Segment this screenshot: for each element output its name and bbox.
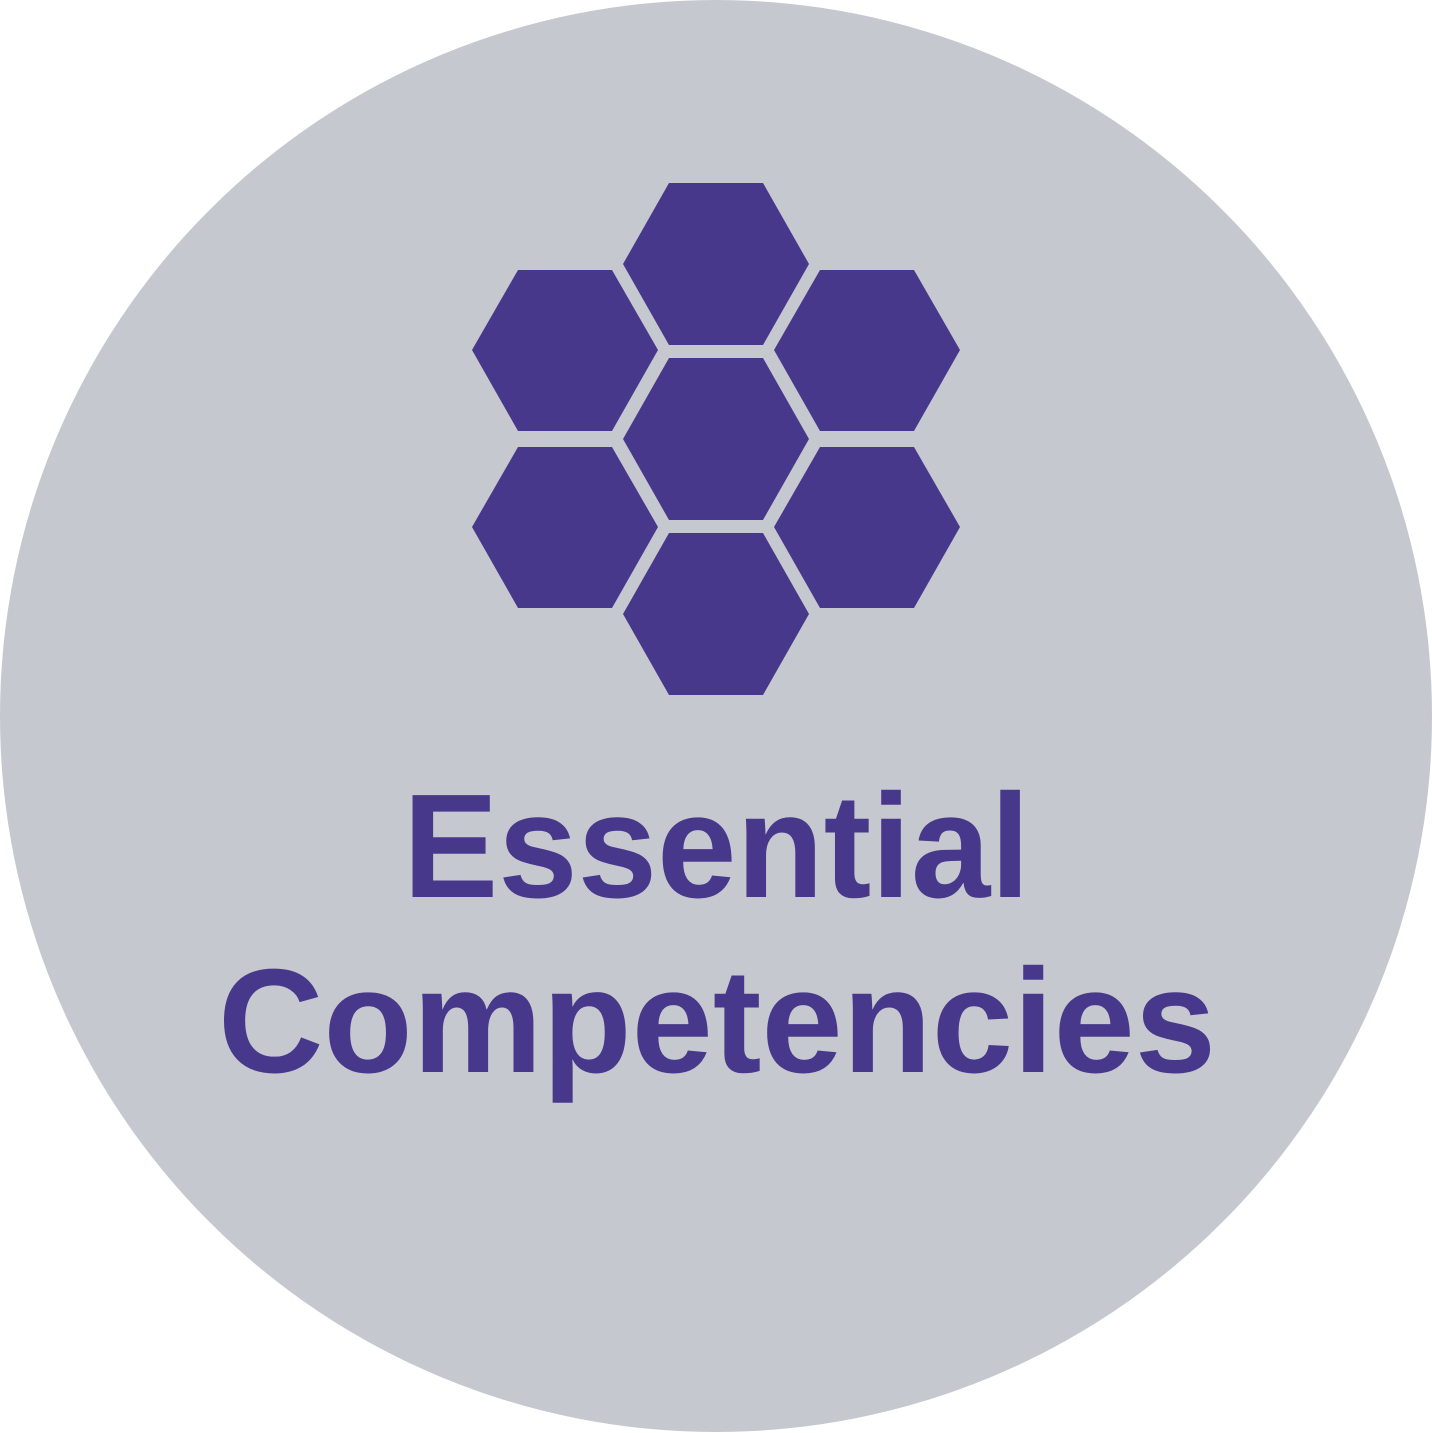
title: Competencies bbox=[218, 939, 1216, 1104]
title bbox=[218, 764, 1216, 1104]
title: Essential bbox=[403, 764, 1030, 929]
icon: hexagon cluster bbox=[472, 183, 960, 695]
